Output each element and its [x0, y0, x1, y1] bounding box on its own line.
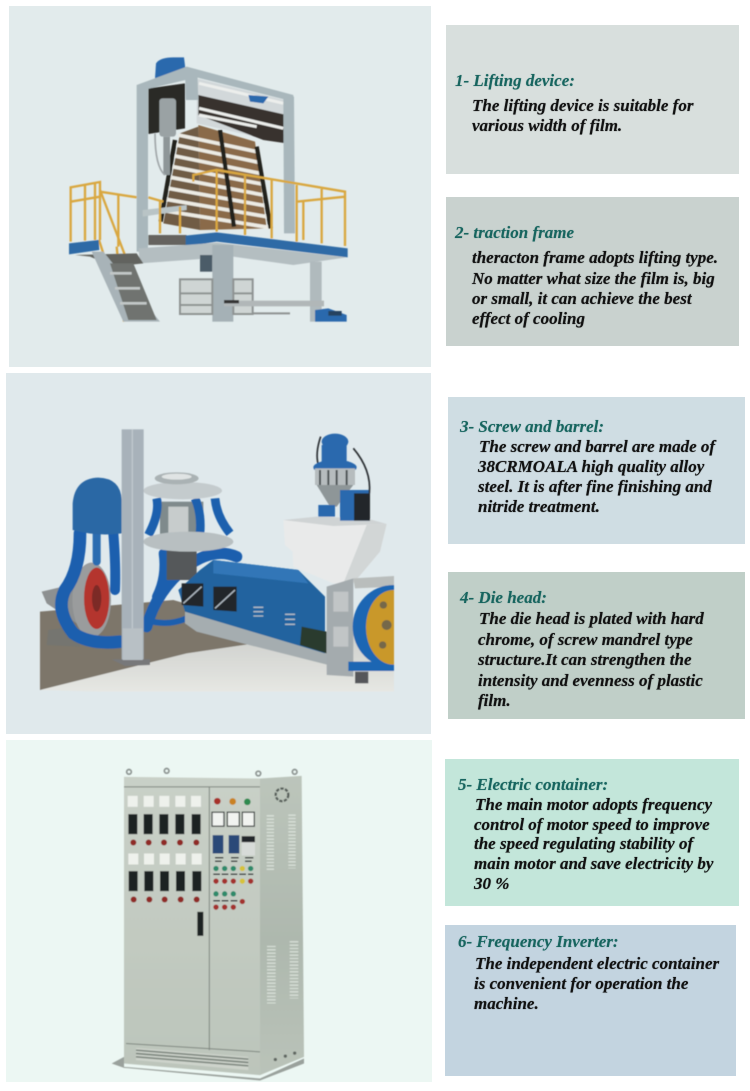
die head and air rings	[143, 472, 233, 580]
gearbox with yellow gear	[326, 576, 395, 684]
blower with red fan	[42, 563, 111, 647]
heading: 6- Frequency Inverter:	[458, 932, 619, 951]
yellow railings	[71, 170, 345, 322]
vacuum loader	[313, 434, 370, 521]
blue platform edges	[69, 232, 348, 257]
text box 3: screw and barrel	[448, 397, 745, 544]
frequency inverters	[213, 835, 255, 856]
description continued: 30 %	[474, 874, 509, 893]
panel: extruder, die head and blower photo	[6, 373, 431, 734]
description continued: various width of film.	[472, 116, 622, 135]
green and yellow buttons	[213, 866, 253, 896]
take-up roller and blue motor	[224, 300, 347, 322]
platform underside and legs	[75, 243, 347, 322]
text box 2: traction frame	[446, 197, 739, 346]
description continued: No matter what size the film is, big	[472, 269, 715, 288]
film and slatted collapsing frame	[161, 125, 271, 230]
cabinet side	[260, 776, 304, 1075]
side louvres	[270, 814, 294, 1004]
back rollers and dark beam	[197, 78, 287, 143]
left door red buttons	[130, 840, 200, 902]
description continued: structure.It can strengthen the	[478, 650, 692, 669]
extruder body	[178, 560, 328, 665]
description continued: 38CRMOALA high quality alloy	[478, 457, 704, 476]
panel: electric cabinet photo	[6, 740, 432, 1082]
dark drive mechanism	[148, 83, 185, 175]
description: The independent electric container	[475, 954, 719, 973]
blue air dome	[73, 478, 122, 534]
heading: 4- Die head:	[460, 588, 547, 607]
icon: blue motor housing on top	[155, 57, 185, 80]
text box 6: frequency inverter	[445, 925, 736, 1076]
heading: 2- traction frame	[455, 223, 574, 242]
floor shadow	[112, 1057, 304, 1080]
lifting rings	[127, 768, 297, 776]
cabinet front	[124, 777, 260, 1075]
description continued: the speed regulating stability of	[474, 834, 693, 853]
description continued: nitride treatment.	[478, 497, 600, 516]
bottom vent	[136, 1048, 248, 1070]
text box 5: electric container	[445, 759, 739, 906]
description continued: control of motor speed to improve	[474, 815, 710, 834]
text box 1: lifting device	[446, 25, 739, 174]
gauges	[212, 812, 254, 826]
text box 4: die head	[448, 572, 745, 719]
description continued: main motor and save electricity by	[474, 854, 713, 873]
description continued: steel. It is after fine finishing and	[478, 477, 712, 496]
red switches	[213, 878, 253, 910]
description continued: machine.	[474, 994, 539, 1013]
heading: 5- Electric container:	[458, 775, 608, 794]
steel support post	[112, 429, 150, 666]
heading: 1- Lifting device:	[455, 71, 575, 90]
description continued: intensity and evenness of plastic	[478, 671, 703, 690]
left door meters	[128, 796, 202, 864]
door handle	[197, 912, 203, 936]
floor	[40, 600, 394, 692]
description: The main motor adopts frequency	[475, 795, 712, 814]
cooling ring cage	[180, 279, 290, 314]
indicator lights	[214, 798, 251, 805]
left door controllers	[128, 814, 201, 891]
description continued: is convenient for operation the	[474, 974, 688, 993]
description: The screw and barrel are made of	[479, 437, 715, 456]
side bolts	[274, 1052, 296, 1061]
description: The lifting device is suitable for	[472, 96, 693, 115]
heading: 3- Screw and barrel:	[460, 417, 604, 436]
description: theracton frame adopts lifting type.	[472, 248, 718, 267]
top-side fan	[276, 788, 288, 801]
white hopper	[283, 517, 387, 583]
panel: lifting device and traction frame photo	[9, 6, 431, 367]
switch labels	[213, 858, 253, 901]
description continued: effect of cooling	[472, 309, 585, 328]
description continued: or small, it can achieve the best	[472, 289, 692, 308]
description: The die head is plated with hard	[479, 609, 704, 628]
blue hoses	[61, 533, 237, 642]
description continued: chrome, of screw mandrel type	[478, 630, 693, 649]
description continued: film.	[478, 691, 511, 710]
cabinet top strip and door seams	[124, 787, 260, 1052]
steel frame	[137, 67, 295, 252]
